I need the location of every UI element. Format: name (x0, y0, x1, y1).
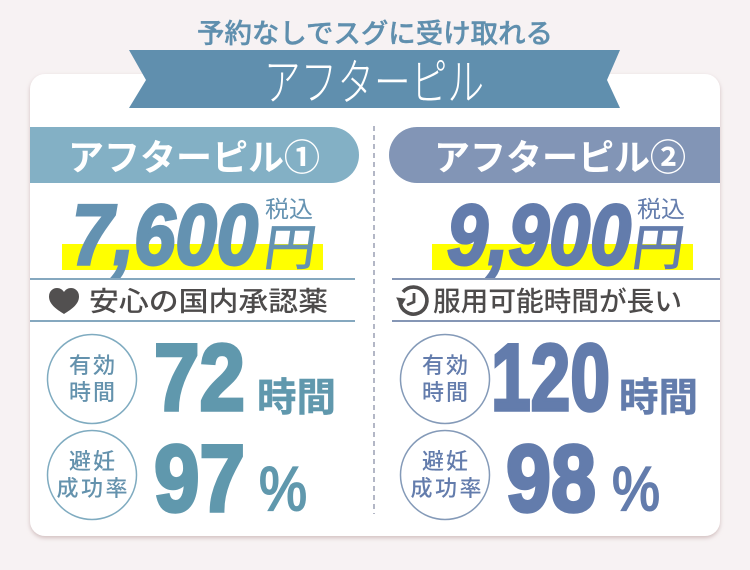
stat: effective time 72: 72 (154, 325, 245, 431)
stat: success rate 98: 避妊 (422, 449, 468, 474)
price: 9,900 yen: 9,900 (447, 188, 631, 283)
stat: effective time 72: 時間 (257, 377, 336, 420)
divider (373, 126, 375, 514)
header: pill 2 (389, 127, 720, 183)
header: pill 2: アフターピル② (434, 137, 686, 178)
stat: success rate 97 (48, 426, 307, 532)
price: 7,600 yen: 円 (260, 220, 320, 276)
price: 7,600 yen: 7,600 (72, 188, 258, 283)
panel: pill 2 (389, 127, 720, 532)
card panel (30, 74, 720, 536)
subtitle: 予約なしでスグに受け取れる (197, 19, 553, 49)
price: 7,600 yen: 税込 (265, 196, 313, 222)
stat: success rate 97: 避妊 (69, 449, 115, 474)
stat: effective time 120: 時間 (422, 380, 468, 405)
stat: effective time 72 (48, 325, 336, 431)
feature row (392, 278, 720, 322)
stat: success rate 97: % (259, 455, 307, 524)
stat: success rate 97: 97 (154, 426, 245, 532)
stat: effective time 120: 有効 (422, 353, 468, 378)
price: 9,900 yen: 円 (628, 220, 688, 276)
panel: pill 1 (30, 127, 359, 532)
stat: effective time 72: 有効 (69, 353, 115, 378)
icon: clock (397, 287, 427, 314)
header: pill 1: アフターピル① (68, 137, 320, 178)
stat: effective time 120 (400, 325, 698, 431)
feature row (30, 278, 355, 322)
stat: success rate 98: 98 (506, 426, 596, 532)
stat: effective time 72: 時間 (69, 380, 115, 405)
stat: effective time 120: 時間 (619, 377, 698, 420)
stat: effective time 120: 120 (491, 325, 610, 431)
stat: success rate 98 (400, 426, 660, 532)
title: アフターピル (264, 55, 484, 111)
header: pill 1 (30, 127, 359, 183)
stat: success rate 97: 成功率 (56, 476, 128, 501)
stat: success rate 98: 成功率 (410, 476, 482, 501)
feature row: 服用可能時間が長い (433, 287, 682, 317)
price: 9,900 yen: 税込 (637, 196, 685, 222)
title ribbon (129, 50, 620, 111)
stat: success rate 98: % (612, 455, 660, 524)
icon: heart (49, 288, 79, 314)
feature row: 安心の国内承認薬 (89, 287, 328, 317)
